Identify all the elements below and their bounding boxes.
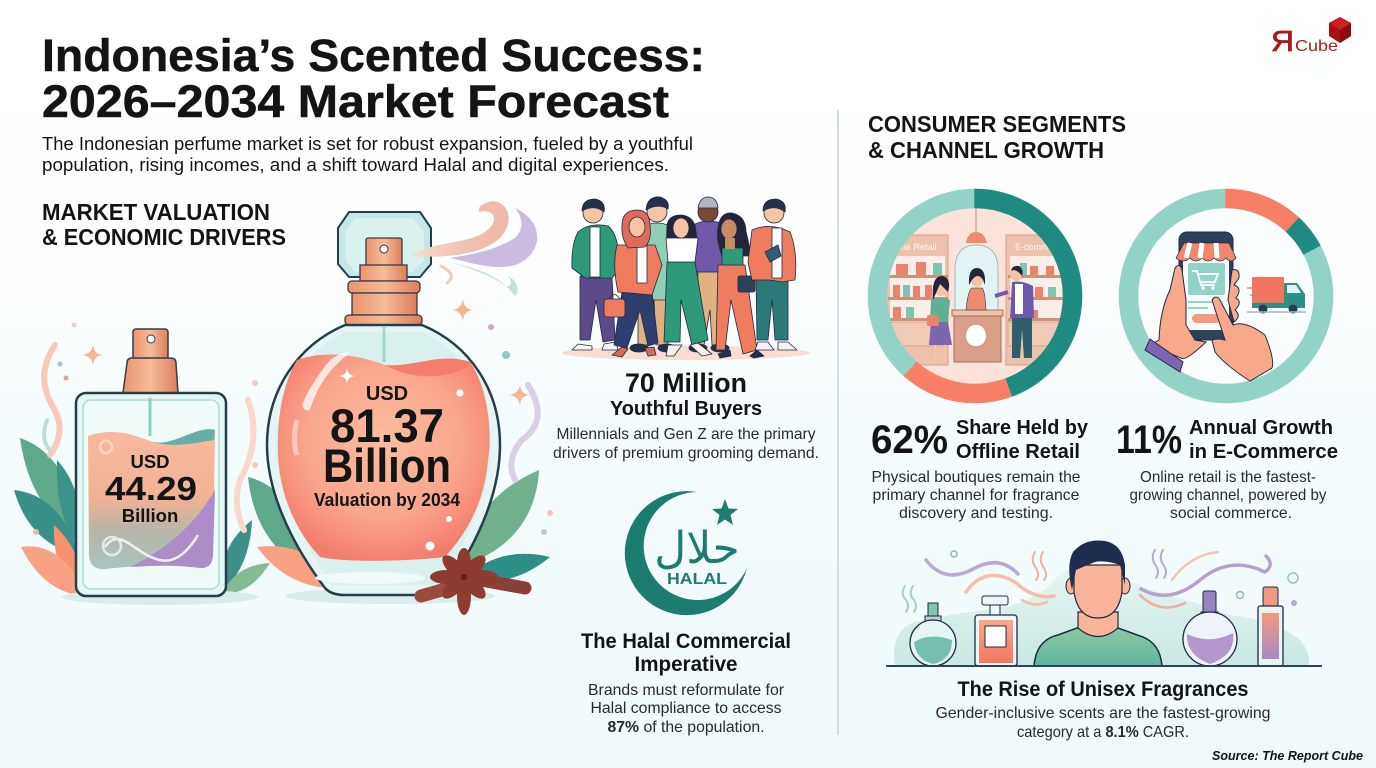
title xyxy=(42,30,705,127)
donut: e-commerce growth with phone scene xyxy=(1128,198,1324,394)
text: rise of unisex fragrances: The Rise of Unisex Fragrances xyxy=(958,678,1248,701)
text: halal commercial imperative xyxy=(581,630,791,736)
heading: consumer segments: CONSUMER SEGMENTS xyxy=(868,111,1126,137)
stat: 11 percent e-commerce growth: 11% xyxy=(1116,418,1182,462)
text: halal commercial imperative: Imperative xyxy=(634,653,738,676)
stat: 11 percent e-commerce growth xyxy=(1116,416,1338,522)
text: halal commercial imperative: The Halal Commercial xyxy=(581,630,791,653)
illustration: group of young buyers xyxy=(562,197,810,360)
logo: RCube: Cube xyxy=(1295,38,1338,55)
bottle: USD 81.37 Billion: Billion xyxy=(323,439,451,492)
stat: 62 percent offline retail: Physical boutiques remain the xyxy=(872,469,1081,486)
leaves behind small bottle xyxy=(14,438,270,605)
stat: 62 percent offline retail: Offline Retail xyxy=(956,440,1080,463)
bottle: USD 44.29 Billion: Billion xyxy=(122,505,178,526)
section divider xyxy=(837,110,839,735)
text: 70 million youthful buyers: Millennials and Gen Z are the primary xyxy=(556,426,816,443)
bottle: USD 44.29 Billion: USD xyxy=(130,451,170,472)
heading: market valuation xyxy=(42,199,286,250)
stat: 11 percent e-commerce growth: growing channel, powered by xyxy=(1130,487,1326,504)
heading: consumer segments xyxy=(868,111,1126,163)
donut: offline retail share with shop scene: ine Retail xyxy=(899,242,937,252)
bottle: USD 81.37 Billion: 81.37 xyxy=(330,399,444,452)
stat: 11 percent e-commerce growth: social commerce. xyxy=(1170,505,1292,522)
heading: consumer segments: & CHANNEL GROWTH xyxy=(868,137,1104,163)
bottle: USD 81.37 Billion: Valuation by 2034 xyxy=(314,490,460,510)
stat: 62 percent offline retail: 62% xyxy=(871,418,948,462)
heading: market valuation: & ECONOMIC DRIVERS xyxy=(42,224,286,250)
subtitle text: population, rising incomes, and a shift toward Halal and digital experiences. xyxy=(42,155,669,175)
stat: 62 percent offline retail: discovery and testing. xyxy=(899,505,1053,522)
bottle: USD 81.37 Billion xyxy=(267,212,500,595)
icon: cinnamon and star anise xyxy=(421,548,525,615)
source note: Source: The Report Cube xyxy=(1212,749,1363,763)
bottle: USD 81.37 Billion: USD xyxy=(366,383,408,405)
stat: 11 percent e-commerce growth: Online retail is the fastest- xyxy=(1140,469,1316,486)
icon: halal crescent: حلال xyxy=(654,523,740,574)
subtitle text xyxy=(42,134,693,175)
title: Indonesia’s Scented Success: xyxy=(42,30,705,81)
text: 70 million youthful buyers xyxy=(553,368,819,462)
donut: offline retail share with shop scene xyxy=(878,198,1076,394)
donut: offline retail share with shop scene: E-comm xyxy=(1015,242,1048,252)
icon: halal crescent xyxy=(625,491,747,615)
subtitle text: The Indonesian perfume market is set for robust expansion, fueled by a youthful xyxy=(42,134,693,154)
stat: 62 percent offline retail xyxy=(871,416,1089,522)
title: 2026–2034 Market Forecast xyxy=(42,76,669,127)
text: halal commercial imperative: Brands must reformulate for xyxy=(588,682,785,699)
heading: market valuation: MARKET VALUATION xyxy=(42,199,270,225)
text: halal commercial imperative: Halal compliance to access xyxy=(590,700,782,717)
icon: spray scent swirl xyxy=(411,201,537,296)
icon: halal crescent: HALAL xyxy=(667,571,727,588)
bottle: USD 44.29 Billion xyxy=(76,329,226,596)
sparkles and dots xyxy=(33,298,553,535)
bottle: USD 44.29 Billion: 44.29 xyxy=(105,470,197,507)
decorative wisps small bottle xyxy=(44,345,253,530)
leaves behind large bottle xyxy=(248,470,550,604)
logo: RCube: Я xyxy=(1271,26,1294,58)
text: rise of unisex fragrances: Gender-inclusive scents are the fastest-growing xyxy=(936,705,1270,722)
logo: RCube xyxy=(1271,17,1351,58)
stat: 62 percent offline retail: Share Held by xyxy=(956,416,1089,439)
stat: 11 percent e-commerce growth: Annual Growth xyxy=(1189,416,1333,439)
text: 70 million youthful buyers: Youthful Buyers xyxy=(610,398,762,420)
text: rise of unisex fragrances: category at a 8.1% CAGR. xyxy=(1017,724,1189,741)
text: rise of unisex fragrances xyxy=(936,678,1270,741)
illustration: unisex fragrance person and bottles xyxy=(886,540,1322,666)
text: halal commercial imperative: 87% of the population. xyxy=(608,719,764,736)
text: 70 million youthful buyers: 70 Million xyxy=(625,368,747,398)
stat: 11 percent e-commerce growth: in E-Commerce xyxy=(1189,440,1338,463)
stat: 62 percent offline retail: primary channel for fragrance xyxy=(872,487,1080,504)
text: 70 million youthful buyers: drivers of premium grooming demand. xyxy=(553,445,819,462)
